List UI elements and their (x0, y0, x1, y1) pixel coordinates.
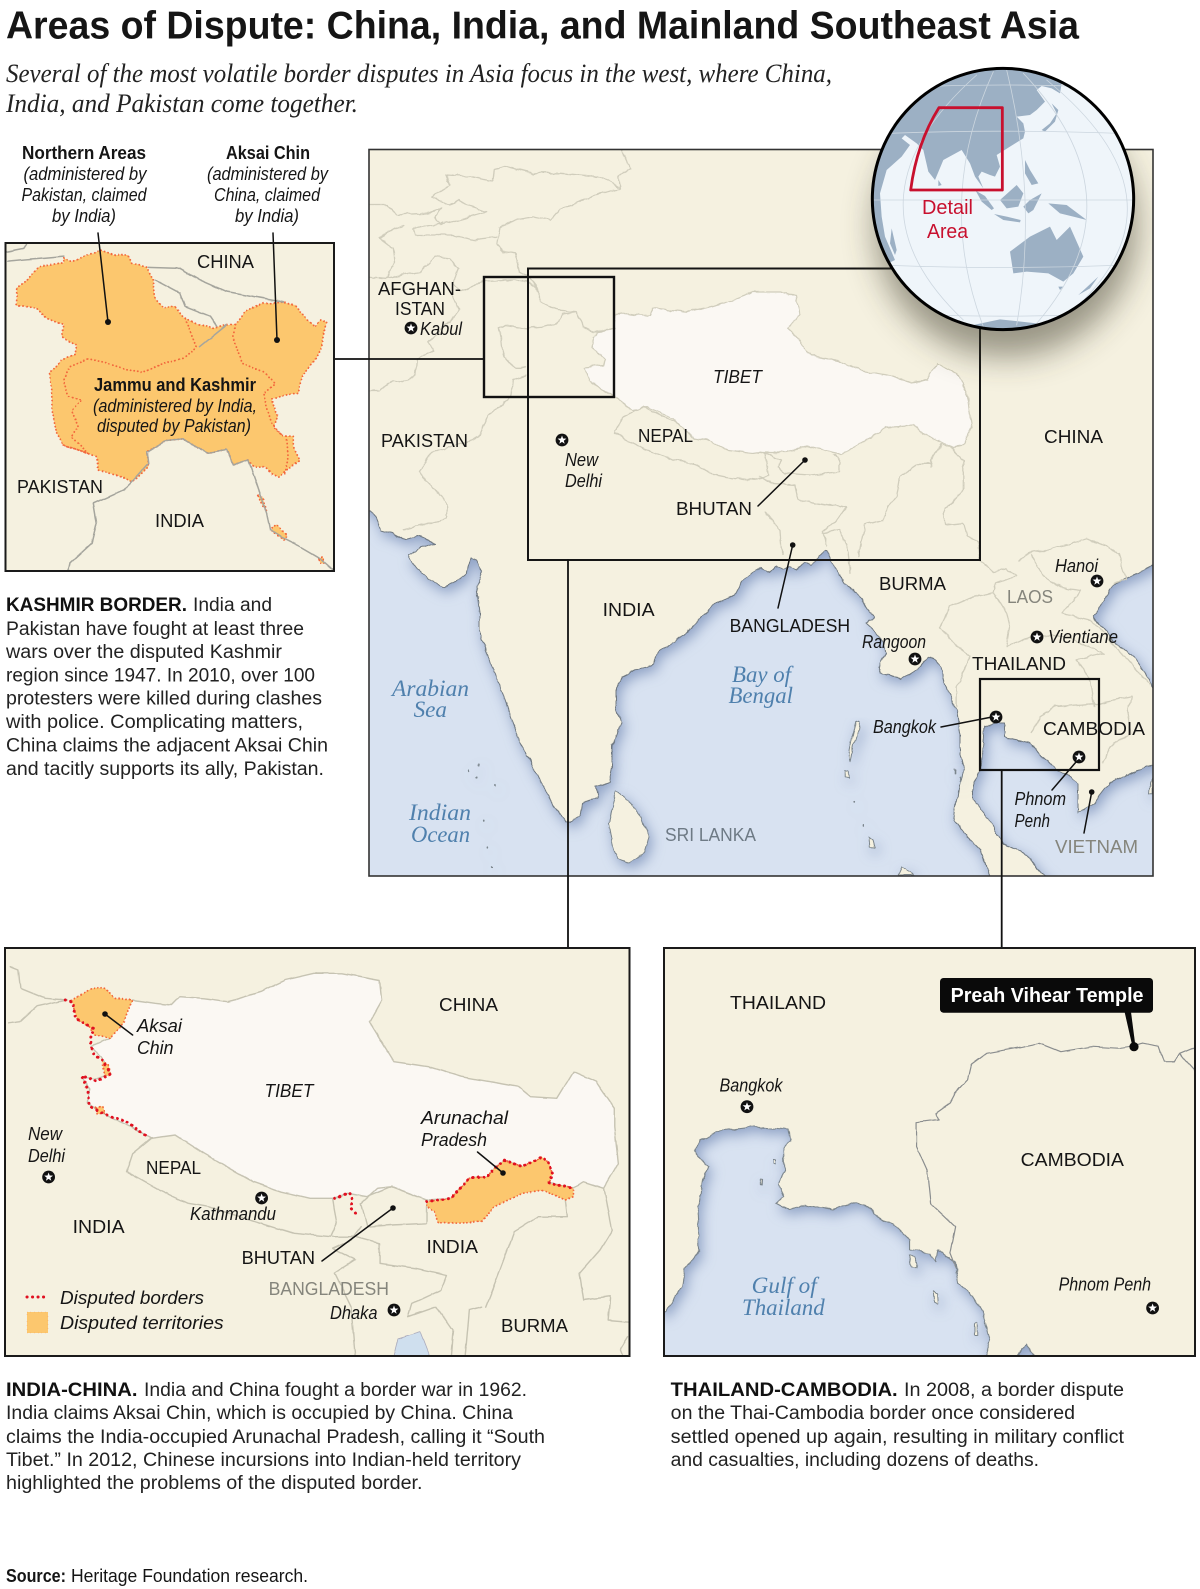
panel labels: Kathmandu (190, 1203, 276, 1224)
disputed borders (65, 1000, 147, 1137)
globe land masses (874, 70, 1098, 328)
text block: Kashmir border (5, 595, 328, 780)
main map labels: INDIA (603, 599, 655, 620)
panel labels: Phnom Penh (1059, 1274, 1151, 1295)
connector: India-China panel to map (567, 560, 569, 948)
main map labels: New (565, 449, 599, 470)
panel labels: CHINA (439, 994, 499, 1015)
text block: Kashmir border: Pakistan have fought at least three (6, 619, 304, 640)
main map labels: CHINA (1044, 426, 1104, 447)
globe locator (860, 60, 1137, 337)
legend: Disputed borders (60, 1287, 204, 1308)
main map labels: Ocean (411, 822, 470, 847)
main map labels: AFGHAN- (378, 278, 461, 299)
main map labels: BURMA (879, 573, 947, 594)
panel labels: New (28, 1123, 64, 1144)
text block: Kashmir border: wars over the disputed Kashmir (5, 642, 283, 663)
panel labels: Aksai (136, 1015, 183, 1036)
text block: Thailand-Cambodia: THAILAND-CAMBODIA. (671, 1380, 898, 1401)
Kashmir inset labels: (administered by India, (93, 395, 257, 416)
panel labels: INDIA (426, 1236, 479, 1257)
text block: India-China: India and China fought a border war in 1962. (144, 1380, 527, 1401)
main map labels: ISTAN (395, 298, 445, 319)
main map labels: Bay of (732, 662, 795, 687)
panel labels: Chin (137, 1037, 174, 1058)
text block: India-China: highlighted the problems of the disputed border. (6, 1473, 422, 1494)
detail area label (922, 196, 973, 243)
panel: Thailand-Cambodia map (659, 945, 1200, 1365)
text block: Thailand-Cambodia: and casualties, including dozens of deaths. (671, 1450, 1039, 1471)
callout: Preah Vihear Temple (940, 978, 1153, 1051)
pointer: Aksai Chin (273, 233, 280, 343)
label: Aksai Chin: (administered by (207, 163, 330, 184)
disputed territories (71, 988, 133, 1038)
panel labels: NEPAL (146, 1157, 201, 1178)
label: Northern Areas (22, 143, 148, 226)
Cambodia border (917, 1043, 1195, 1267)
label: Northern Areas: Pakistan, claimed (22, 184, 147, 205)
panel labels: Gulf of (752, 1273, 820, 1298)
panel: main regional map (358, 135, 1168, 892)
text block: Kashmir border: KASHMIR BORDER. (6, 595, 187, 616)
country borders west (368, 150, 768, 530)
Kashmir inset labels: disputed by Pakistan) (97, 415, 251, 436)
main map labels: PAKISTAN (381, 430, 468, 451)
text block: Kashmir border: region since 1947. In 2010, over 100 (6, 666, 315, 686)
text block: Thailand-Cambodia: settled opened up again, resulting in military conflict (671, 1427, 1125, 1448)
Kashmir inset labels: PAKISTAN (17, 476, 103, 497)
text block: Kashmir border: China claims the adjacent Aksai Chin (6, 736, 328, 756)
panel frame (5, 948, 630, 1356)
panel labels: BANGLADESH (269, 1278, 389, 1299)
panel labels (28, 994, 569, 1336)
panel labels: Arunachal (420, 1107, 509, 1128)
text block: Thailand-Cambodia (671, 1380, 1125, 1471)
panel labels: CAMBODIA (1021, 1149, 1125, 1170)
main map labels: CAMBODIA (1043, 718, 1146, 739)
panel labels (720, 992, 1159, 1320)
main map labels: BHUTAN (676, 498, 752, 519)
label: Northern Areas: by India) (52, 205, 116, 226)
main map labels: Penh (1014, 810, 1050, 831)
detail area trapezoid (911, 108, 1002, 190)
text block: India-China: India claims Aksai Chin, which is occupied by China. China (6, 1403, 513, 1424)
panel labels: BHUTAN (242, 1247, 315, 1268)
main map labels: Vientiane (1048, 626, 1118, 647)
globe graticule (870, 70, 1137, 327)
panel labels: Dhaka (330, 1302, 378, 1323)
main map labels: Indian (408, 800, 471, 825)
title: Areas of Dispute: China, India, and Mainland Southeast Asia (6, 4, 1079, 48)
country borders (8, 967, 67, 1023)
main map labels: Phnom (1014, 788, 1066, 809)
text block: India-China: INDIA-CHINA. (6, 1380, 138, 1401)
globe shadow (875, 95, 1137, 357)
locator box: Kashmir detail area (484, 277, 614, 397)
label: Northern Areas: Northern Areas (22, 143, 146, 163)
map frame (369, 150, 1153, 876)
legend (27, 1287, 224, 1333)
land and coastline (358, 135, 1168, 892)
locator box: India-China detail area (528, 268, 980, 560)
callout: Preah Vihear Temple: Preah Vihear Temple (951, 984, 1144, 1007)
Kashmir inset labels: CHINA (197, 251, 255, 272)
detail area label: Detail (922, 196, 973, 219)
connector: Kashmir inset to map (334, 358, 484, 360)
Kashmir inset frame (6, 243, 334, 571)
main map labels: LAOS (1007, 586, 1053, 607)
source note: Source: (6, 1566, 66, 1586)
Kashmir inset labels (17, 251, 257, 531)
subtitle: India, and Pakistan come together. (5, 89, 358, 118)
legend: Disputed territories (60, 1312, 224, 1333)
panel frame (664, 948, 1195, 1356)
country borders east (760, 443, 1150, 707)
text block: Kashmir border: with police. Complicating matters, (5, 712, 303, 733)
label: Aksai Chin: Aksai Chin (226, 143, 310, 163)
panel labels: Bangkok (720, 1075, 784, 1096)
land and gulf coastline (659, 945, 1200, 1365)
tibet (585, 292, 972, 455)
Kashmir inset labels: Jammu and Kashmir (94, 375, 256, 395)
panel labels: TIBET (264, 1080, 315, 1101)
text block: Thailand-Cambodia: on the Thai-Cambodia border once considered (671, 1403, 1075, 1424)
main map labels: Arabian (390, 676, 469, 701)
source note: Heritage Foundation research. (71, 1566, 308, 1586)
panel labels: BURMA (501, 1315, 569, 1336)
text block: India-China: claims the India-occupied Arunachal Pradesh, calling it “South (6, 1427, 545, 1448)
main map labels: SRI LANKA (665, 824, 757, 845)
panel labels: Delhi (28, 1145, 66, 1166)
pointer: Northern Areas (98, 233, 111, 325)
sri lanka and islands (469, 721, 1153, 875)
main map labels: Bangkok (873, 716, 938, 737)
text block: India-China (6, 1380, 545, 1494)
Kashmir inset labels: INDIA (155, 510, 205, 531)
panel labels: Pradesh (421, 1129, 487, 1150)
main map labels: Bengal (728, 683, 793, 708)
text block: Kashmir border: India and (193, 595, 272, 616)
Bay of Bengal water (394, 1331, 430, 1355)
main map labels: Kabul (420, 318, 463, 339)
panel: Kashmir inset map (6, 233, 334, 571)
main map labels: NEPAL (638, 425, 693, 446)
text block: Kashmir border: protesters were killed during clashes (6, 688, 322, 710)
subtitle (5, 59, 832, 118)
main map labels (378, 278, 1146, 857)
label: Aksai Chin: by India) (235, 205, 299, 226)
panel: India-China map (5, 948, 630, 1363)
main map labels: VIETNAM (1055, 836, 1138, 857)
subtitle: Several of the most volatile border disputes in Asia focus in the west, where China, (6, 59, 832, 88)
tibet plateau (82, 973, 618, 1200)
text block: India-China: Tibet.” In 2012, Chinese incursions into Indian-held territory (6, 1450, 522, 1471)
locator box: Thailand-Cambodia detail area (980, 679, 1099, 770)
main map labels: TIBET (713, 366, 764, 387)
panel labels: Thailand (742, 1295, 825, 1320)
panel labels: INDIA (73, 1216, 125, 1237)
label: Northern Areas: (administered by (24, 163, 148, 184)
text block: Thailand-Cambodia: In 2008, a border dispute (904, 1380, 1124, 1401)
main map labels: Rangoon (862, 631, 926, 652)
connector: Thailand-Cambodia panel to map (1001, 770, 1003, 948)
main map labels: THAILAND (972, 653, 1066, 674)
main map labels: Sea (414, 697, 447, 722)
detail area label: Area (927, 220, 969, 243)
main map labels: Hanoi (1055, 555, 1099, 576)
label: Aksai Chin: China, claimed (214, 184, 321, 205)
main map labels: Delhi (565, 470, 603, 491)
panel labels: THAILAND (730, 992, 826, 1013)
main map labels: BANGLADESH (730, 615, 850, 636)
disputed Kashmir territory (17, 250, 327, 482)
label: Aksai Chin (207, 143, 330, 226)
text block: Kashmir border: and tacitly supports its ally, Pakistan. (6, 759, 324, 780)
